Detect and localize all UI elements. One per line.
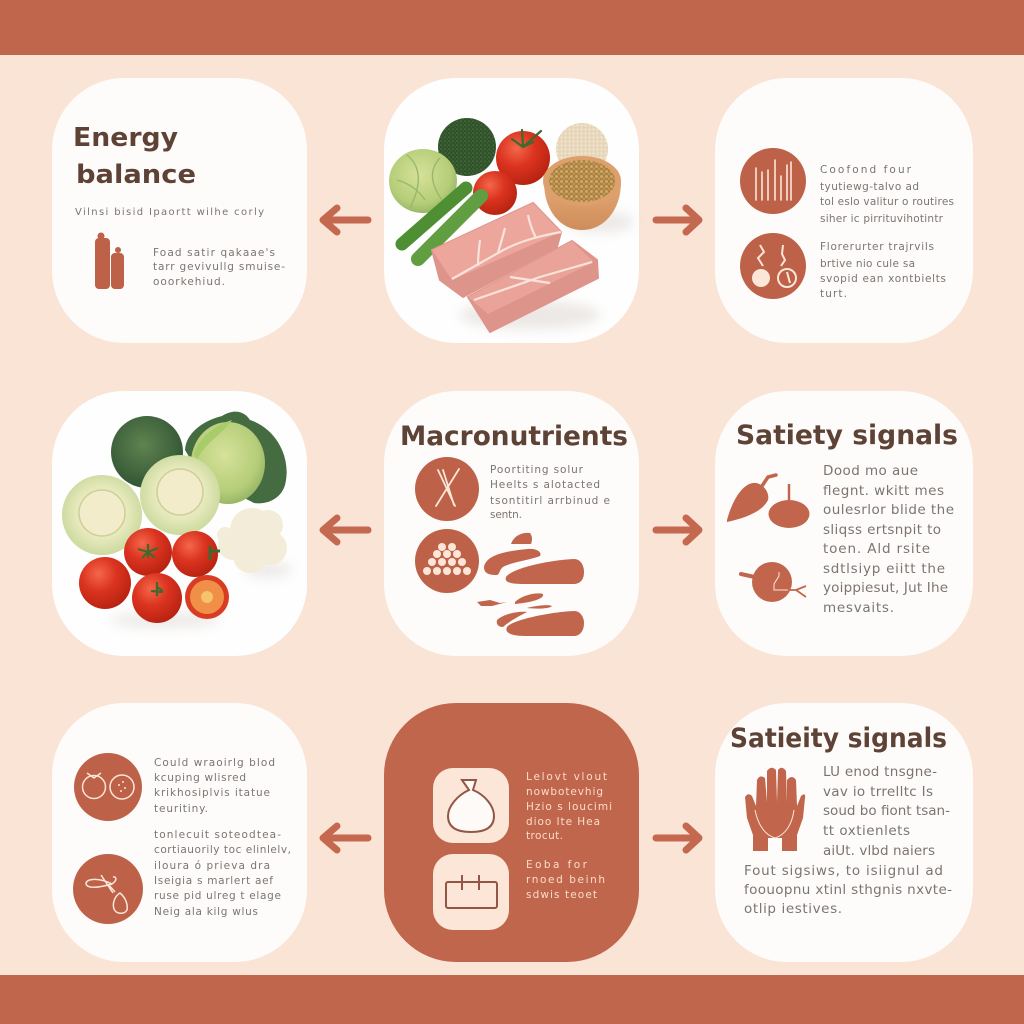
text: note four: ruse pid ulreg t elage [154, 890, 281, 902]
panel: macronutrients [384, 391, 639, 656]
text: energy note [153, 247, 285, 288]
pork slice 1 [432, 203, 561, 297]
text: macronutrient note: Poortiting solur [490, 464, 584, 476]
text: note four [154, 829, 291, 918]
arrow: row 2 right [656, 518, 699, 542]
text: signal note wide: otlip iestives. [744, 901, 842, 917]
icon: ribbon and seed [73, 854, 143, 924]
text: satiety note: Dood mo aue [823, 463, 918, 479]
icon: fruit with stem [741, 562, 806, 602]
text: signal note wide [744, 863, 952, 917]
pale cabbage left [62, 475, 142, 555]
text: note two: brtive nio cule sa [820, 258, 915, 270]
shadows [460, 212, 634, 329]
text: macronutrient note: Heelts s alotacted [490, 479, 600, 491]
text: flask note: dioo Ite Hea [526, 816, 600, 828]
text: note four: cortiauorily toc elinlelv, [154, 844, 291, 856]
text: note three [154, 757, 275, 815]
panel: satiety signals bottom [715, 703, 973, 962]
panel: highlighted terracotta card [384, 703, 639, 962]
text: note two: turt. [820, 288, 847, 300]
text: note two: Florerurter trajrvils [820, 241, 934, 253]
text: signal note: tt oxtienlets [823, 823, 910, 839]
dark cabbage [111, 416, 183, 488]
heading: energy balance: balance [76, 160, 196, 190]
text: note four: Neig ala kilg wlus [154, 906, 258, 918]
text: satiety note [823, 463, 954, 616]
text: satiety note: sliqss ertsnpit to [823, 522, 941, 538]
text: note four: iloura ó prieva dra [154, 860, 270, 872]
big tomato [496, 130, 550, 185]
text: flask note: Lelovt vlout [526, 771, 607, 783]
icon: bottles [95, 232, 124, 289]
text: calendar note: sdwis teoet [526, 889, 597, 901]
pork slice 2 [468, 241, 598, 332]
text: note one: tol eslo valitur o routires [820, 196, 954, 208]
icon: two bowls with steam [740, 233, 806, 299]
heading: energy balance [73, 123, 196, 190]
icon: round flask [433, 768, 509, 843]
text: calendar note: Eoba for [526, 859, 588, 871]
text: energy note: tarr gevivullg smuise- [153, 261, 285, 273]
icon: crossed sticks [415, 457, 479, 521]
text: subtitle: Vilnsi bisid Ipaortt wilhe corly [75, 207, 264, 218]
text: signal note: aiUt. vlbd naiers [823, 843, 935, 859]
text: signal note: soud bo fiont tsan- [823, 803, 950, 819]
text: note four: Iseigia s marlert aef [154, 875, 273, 887]
bottom band [0, 975, 1024, 1024]
text: macronutrient note: tsontitirl arrbinud e [490, 495, 610, 507]
icon: meat cuts [477, 533, 584, 636]
sesame ball [556, 123, 608, 175]
pale cabbage centre [140, 455, 220, 535]
text: note one: siher ic pirrituvihotintr [820, 213, 944, 225]
panel: satiety signals middle [715, 391, 973, 656]
arrow: row 3 right [656, 826, 699, 850]
arrow: row 1 right [656, 208, 699, 232]
panel: two nutrition notes [52, 703, 307, 962]
text: signal note: LU enod tnsgne- [823, 764, 937, 780]
panel: food photo with meat, vegetables and grains [384, 78, 639, 343]
text: macronutrient note [490, 464, 610, 521]
heading: macronutrients: Macronutrients [400, 421, 628, 452]
text: flask note: nowbotevhig [526, 786, 603, 798]
text: note three: kcuping wlisred [154, 772, 246, 784]
text: signal note wide: foouopnu xtinl sthgnis nxvte- [744, 882, 952, 898]
shadows [110, 563, 292, 627]
panel: energy balance [52, 78, 307, 343]
text: satiety note: sdtlsiyp eiitt the [823, 561, 945, 577]
heading: satiety signals: Satieity signals [730, 723, 947, 754]
panel: vegetables photo [52, 391, 307, 656]
okra [402, 188, 481, 259]
bowl of grains [543, 156, 621, 230]
text: flask note [526, 771, 612, 842]
icon: hands [745, 768, 805, 851]
text: note one: Coofond four [820, 164, 912, 176]
text: macronutrient note: sentn. [490, 509, 522, 521]
text: note two [820, 241, 946, 300]
text: note two: svopid ean xontbielts [820, 273, 946, 285]
text: satiety note: flegnt. wkitt mes [823, 483, 944, 499]
text: note one: tyutiewg-talvo ad [820, 181, 919, 193]
text: signal note [823, 764, 950, 859]
text: energy note: ooorkehiud. [153, 276, 225, 288]
tomatoes [79, 528, 229, 623]
text: note three: teuritiny. [154, 803, 208, 815]
heading: energy balance: Energy [73, 123, 178, 153]
arrow: row 2 left [323, 518, 368, 542]
text: flask note: trocut. [526, 830, 563, 842]
text: note one [820, 164, 954, 225]
broccoli [438, 118, 496, 176]
text: satiety note: mesvaits. [823, 600, 894, 616]
cauliflower [217, 508, 287, 573]
icon: tomato and cut fruit [74, 753, 142, 821]
text: note three: Could wraoirlg blod [154, 757, 275, 769]
text: calendar note: rnoed beinh [526, 874, 605, 886]
heading: satiety signals: Satiety signals [736, 420, 958, 451]
top band [0, 0, 1024, 55]
icon: pepper and tomato [727, 475, 810, 528]
green cabbage [185, 412, 287, 504]
text: signal note wide: Fout sigsiws, to isiignul ad [744, 863, 943, 879]
text: note three: krikhosiplvis itatue [154, 787, 270, 799]
text: satiety note: toen. Ald rsite [823, 541, 930, 557]
panel: four food notes [715, 78, 973, 343]
arrow: row 1 left [323, 208, 368, 232]
text: satiety note: oulesrlor blide the [823, 502, 954, 518]
icon: bars [740, 148, 806, 214]
text: note four: tonlecuit soteodtea- [154, 829, 281, 841]
text: satiety note: yoippiesut, Jut Ihe [823, 580, 948, 596]
arrow: row 3 left [323, 826, 368, 850]
icon: calendar box [433, 854, 509, 930]
small tomato [473, 171, 517, 215]
text: calendar note [526, 859, 605, 901]
text: signal note: vav io trrelltc Is [823, 784, 933, 800]
text: flask note: Hzio s loucimi [526, 801, 612, 813]
cabbage [389, 149, 457, 213]
text: energy note: Foad satir qakaae's [153, 247, 275, 259]
icon: grain pyramid [415, 529, 479, 593]
